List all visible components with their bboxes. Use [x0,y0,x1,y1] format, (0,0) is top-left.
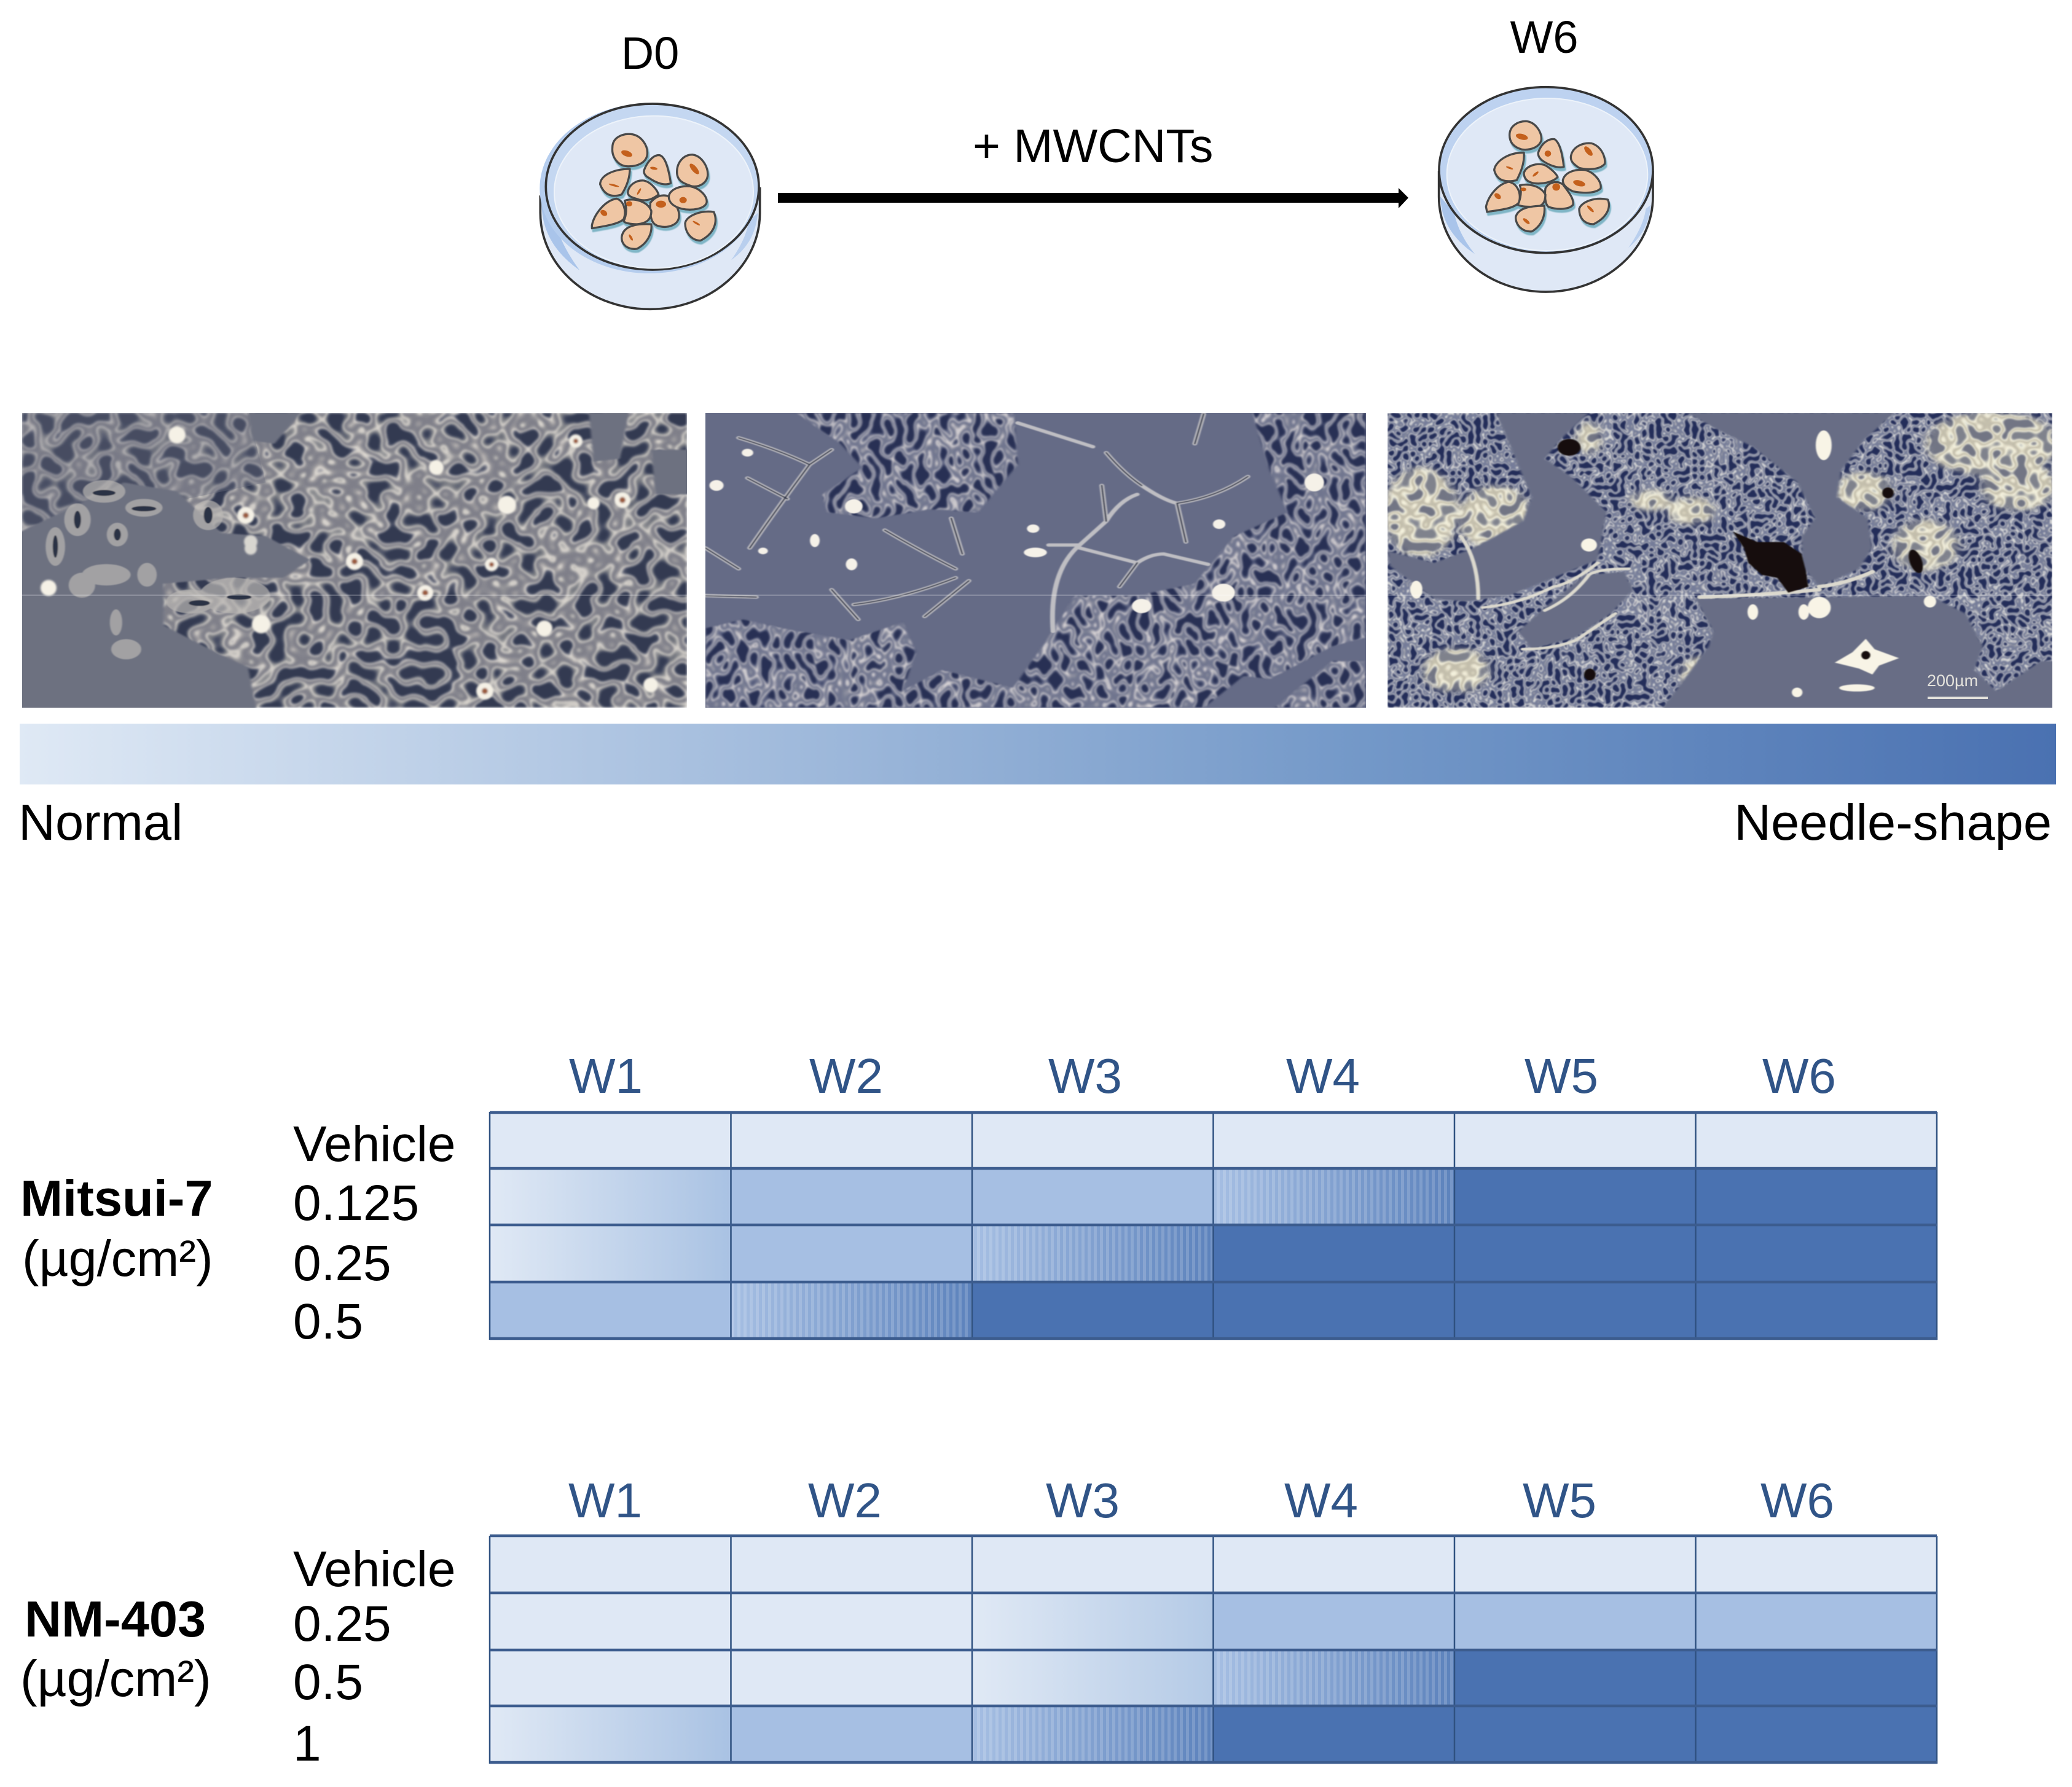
heatmap: Mitsui-7 [490,1112,1937,1340]
label: W6: W6 [1510,12,1578,63]
label: Normal: Normal [18,794,182,851]
material label: NM-403: (µg/cm²) [20,1650,211,1707]
heatmap header: Mitsui-7 weeks: W1 [569,1049,643,1103]
row labels: NM-403 doses [293,1541,455,1772]
photo: needle-shape cells with MWCNT aggregates [1387,413,2058,712]
row labels: Mitsui-7 doses: 0.125 [293,1175,419,1231]
heatmap header: NM-403 weeks: W2 [808,1473,882,1528]
row labels: Mitsui-7 doses: 0.5 [293,1294,363,1350]
heatmap header: NM-403 weeks: W4 [1284,1473,1358,1528]
icon: petri dish W6 [1439,87,1653,292]
heatmap header: Mitsui-7 weeks: W4 [1286,1049,1360,1103]
icon: petri dish D0 [540,103,760,309]
heatmap header: NM-403 weeks: W1 [568,1473,642,1528]
label: D0: D0 [621,28,679,79]
material label: Mitsui-7: (µg/cm²) [22,1230,213,1287]
row labels: NM-403 doses: 1 [293,1716,321,1772]
row labels: Mitsui-7 doses [293,1116,455,1350]
label: Needle-shape: Needle-shape [1734,794,2052,851]
material label: NM-403 [20,1590,211,1707]
row labels: NM-403 doses: 0.5 [293,1654,363,1710]
photo: normal cobblestone cells [18,413,691,712]
gradient scale bar [20,724,2056,784]
heatmap header: NM-403 weeks [568,1473,1834,1528]
heatmap header: Mitsui-7 weeks: W2 [809,1049,883,1103]
row labels: NM-403 doses: 0.25 [293,1596,391,1652]
row labels: Mitsui-7 doses: 0.25 [293,1235,391,1291]
material label: Mitsui-7 [20,1170,213,1287]
label: MWCNTs treatment: + MWCNTs [973,120,1213,173]
heatmap header: Mitsui-7 weeks: W5 [1525,1049,1598,1103]
heatmap header: Mitsui-7 weeks: W3 [1048,1049,1122,1103]
photo: mixed cells with needle shapes [705,413,1366,708]
heatmap header: NM-403 weeks: W3 [1046,1473,1120,1528]
material label: NM-403: NM-403 [25,1590,206,1648]
heatmap header: NM-403 weeks: W6 [1760,1473,1834,1528]
heatmap header: Mitsui-7 weeks: W6 [1762,1049,1836,1103]
scale bar: 200 µm: 200µm [1927,671,1978,690]
heatmap header: NM-403 weeks: W5 [1523,1473,1596,1528]
scale bar: 200 µm [1928,675,1988,699]
row labels: Mitsui-7 doses: Vehicle [293,1116,455,1172]
material label: Mitsui-7: Mitsui-7 [20,1170,213,1227]
row labels: NM-403 doses: Vehicle [293,1541,455,1597]
heatmap header: Mitsui-7 weeks [569,1049,1836,1103]
heatmap: NM-403 [490,1536,1937,1764]
arrow: D0 to W6 [778,188,1408,208]
